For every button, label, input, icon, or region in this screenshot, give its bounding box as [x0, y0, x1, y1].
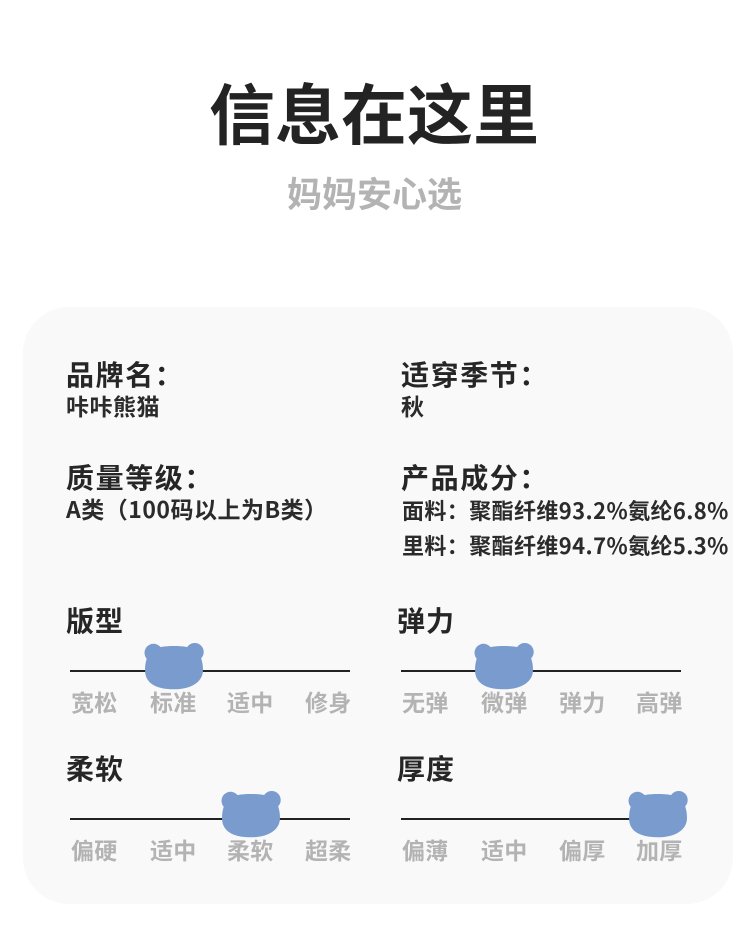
- subtitle: 妈妈安心选: [287, 167, 462, 218]
- heading: elasticity: 弹力: [397, 600, 455, 640]
- label: thick: 偏厚: [559, 832, 606, 866]
- scale line: [70, 670, 350, 672]
- heading: fit: 版型: [66, 600, 124, 640]
- scale line: [401, 818, 681, 820]
- label: extra thick: 加厚: [636, 832, 683, 866]
- label: medium: 适中: [150, 832, 197, 866]
- label: standard: 标准: [150, 684, 197, 718]
- label: stretch: 弹力: [559, 684, 606, 718]
- slider: elasticity: [397, 600, 683, 718]
- label: thin: 偏薄: [402, 832, 449, 866]
- scale line: [70, 818, 350, 820]
- scale line: [401, 670, 681, 672]
- heading: composition: 产品成分：: [401, 457, 549, 497]
- text: grade value: A类（100码以上为B类）: [66, 491, 328, 525]
- text: outer fabric: 面料：聚酯纤维93.2%氨纶6.8%: [402, 494, 729, 526]
- heading: season: 适穿季节：: [401, 354, 549, 394]
- label: firm: 偏硬: [71, 832, 118, 866]
- title: 信息在这里: [209, 63, 539, 159]
- label: loose: 宽松: [71, 684, 118, 718]
- text: season value: 秋: [401, 388, 424, 422]
- slider: softness: [66, 748, 352, 866]
- label: extra soft: 超柔: [305, 832, 352, 866]
- label: slim: 修身: [305, 684, 352, 718]
- slider: thickness: [397, 748, 688, 866]
- heading: softness: 柔软: [66, 748, 124, 788]
- label: medium: 适中: [227, 684, 274, 718]
- text: brand value: 咔咔熊猫: [66, 388, 160, 422]
- label: soft: 柔软: [227, 832, 274, 866]
- icon: bear marker at extra thick: [628, 791, 688, 838]
- icon: bear marker at soft: [222, 791, 281, 838]
- label: medium: 适中: [481, 832, 528, 866]
- heading: quality grade: 质量等级：: [66, 457, 214, 497]
- heading: brand name: 品牌名：: [66, 354, 184, 394]
- slider: fit: [66, 600, 352, 718]
- label: slight stretch: 微弹: [481, 684, 528, 718]
- panel: product information: [23, 307, 733, 904]
- label: no stretch: 无弹: [402, 684, 449, 718]
- icon: bear marker at slight stretch: [474, 643, 534, 690]
- icon: bear marker at standard: [144, 643, 204, 690]
- label: high stretch: 高弹: [636, 684, 683, 718]
- text: lining fabric: 里料：聚酯纤维94.7%氨纶5.3%: [402, 529, 729, 561]
- heading: thickness: 厚度: [397, 748, 455, 788]
